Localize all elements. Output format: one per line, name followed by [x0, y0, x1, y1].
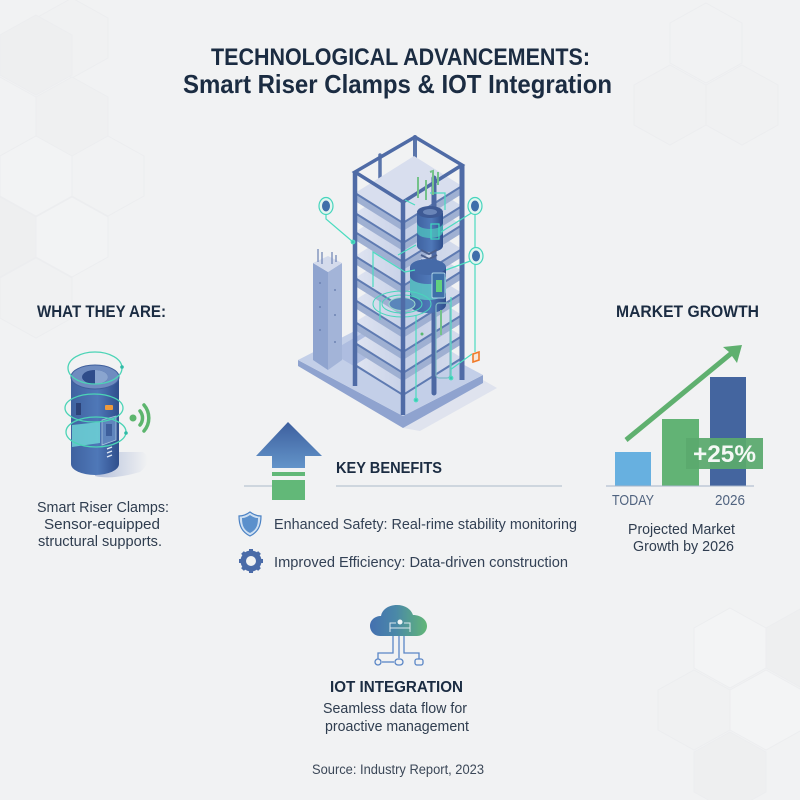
- title: TECHNOLOGICAL ADVANCEMENTS:: [211, 44, 590, 71]
- green conduits: [418, 171, 441, 336]
- description: smart riser clamps: Sensor-equipped: [44, 516, 160, 533]
- description: projected growth: Growth by 2026: [633, 538, 734, 555]
- heading: what they are: WHAT THEY ARE:: [37, 303, 166, 321]
- inner column: [432, 178, 436, 393]
- benefit: enhanced safety: Enhanced Safety: Real-rime stability monitoring: [274, 516, 577, 533]
- description: iot integration: proactive management: [325, 718, 470, 735]
- sensor node upper right: [468, 198, 482, 214]
- illustration: isometric building with IoT sensors: [298, 137, 497, 431]
- lower riser clamp: [410, 259, 446, 313]
- heading: key benefits: KEY BENEFITS: [336, 460, 442, 477]
- benefit: improved efficiency: Improved Efficiency: Data-driven construction: [274, 554, 568, 571]
- title: [183, 44, 612, 99]
- back columns: [380, 137, 415, 178]
- description: smart riser clamps: Smart Riser Clamps:: [37, 499, 169, 516]
- callout: +25%: +25%: [693, 441, 756, 468]
- icon: up arrow: [256, 422, 322, 500]
- concrete column: [313, 249, 342, 370]
- description: smart riser clamps: [37, 499, 169, 550]
- sensor disc: [373, 291, 431, 317]
- bar chart: [606, 345, 763, 509]
- icon: gear: [239, 549, 263, 573]
- panel: iot integration: [323, 605, 470, 735]
- icon: smart riser clamp: [65, 352, 149, 477]
- bar chart: TODAY: [612, 492, 654, 509]
- bar chart: 2026: [715, 492, 745, 509]
- front columns: [355, 137, 462, 415]
- panel: key benefits: [239, 422, 577, 573]
- floor slabs: [355, 156, 462, 395]
- description: projected growth: Projected Market: [628, 521, 736, 538]
- sensor node lower right: [469, 248, 483, 264]
- icon: cloud network: [370, 605, 427, 665]
- sensor wiring: [326, 193, 475, 402]
- sensor node left: [319, 198, 333, 214]
- title: Smart Riser Clamps & IOT Integration: [183, 69, 612, 99]
- icon: wireless signal: [130, 405, 149, 431]
- icon: shield: [239, 512, 261, 536]
- source note: Source: Industry Report, 2023: [312, 762, 484, 777]
- description: projected growth: [628, 521, 736, 555]
- description: iot integration: [323, 700, 470, 735]
- description: iot integration: Seamless data flow for: [323, 700, 467, 717]
- upper riser clamp: [417, 206, 443, 269]
- panel: market growth: [606, 303, 763, 555]
- orange tag: [473, 352, 479, 362]
- panel: what they are: [37, 303, 169, 550]
- heading: market growth: MARKET GROWTH: [616, 303, 759, 321]
- heading: iot integration: IOT INTEGRATION: [330, 679, 463, 696]
- growth arrow: [624, 345, 742, 442]
- description: smart riser clamps: structural supports.: [38, 533, 162, 550]
